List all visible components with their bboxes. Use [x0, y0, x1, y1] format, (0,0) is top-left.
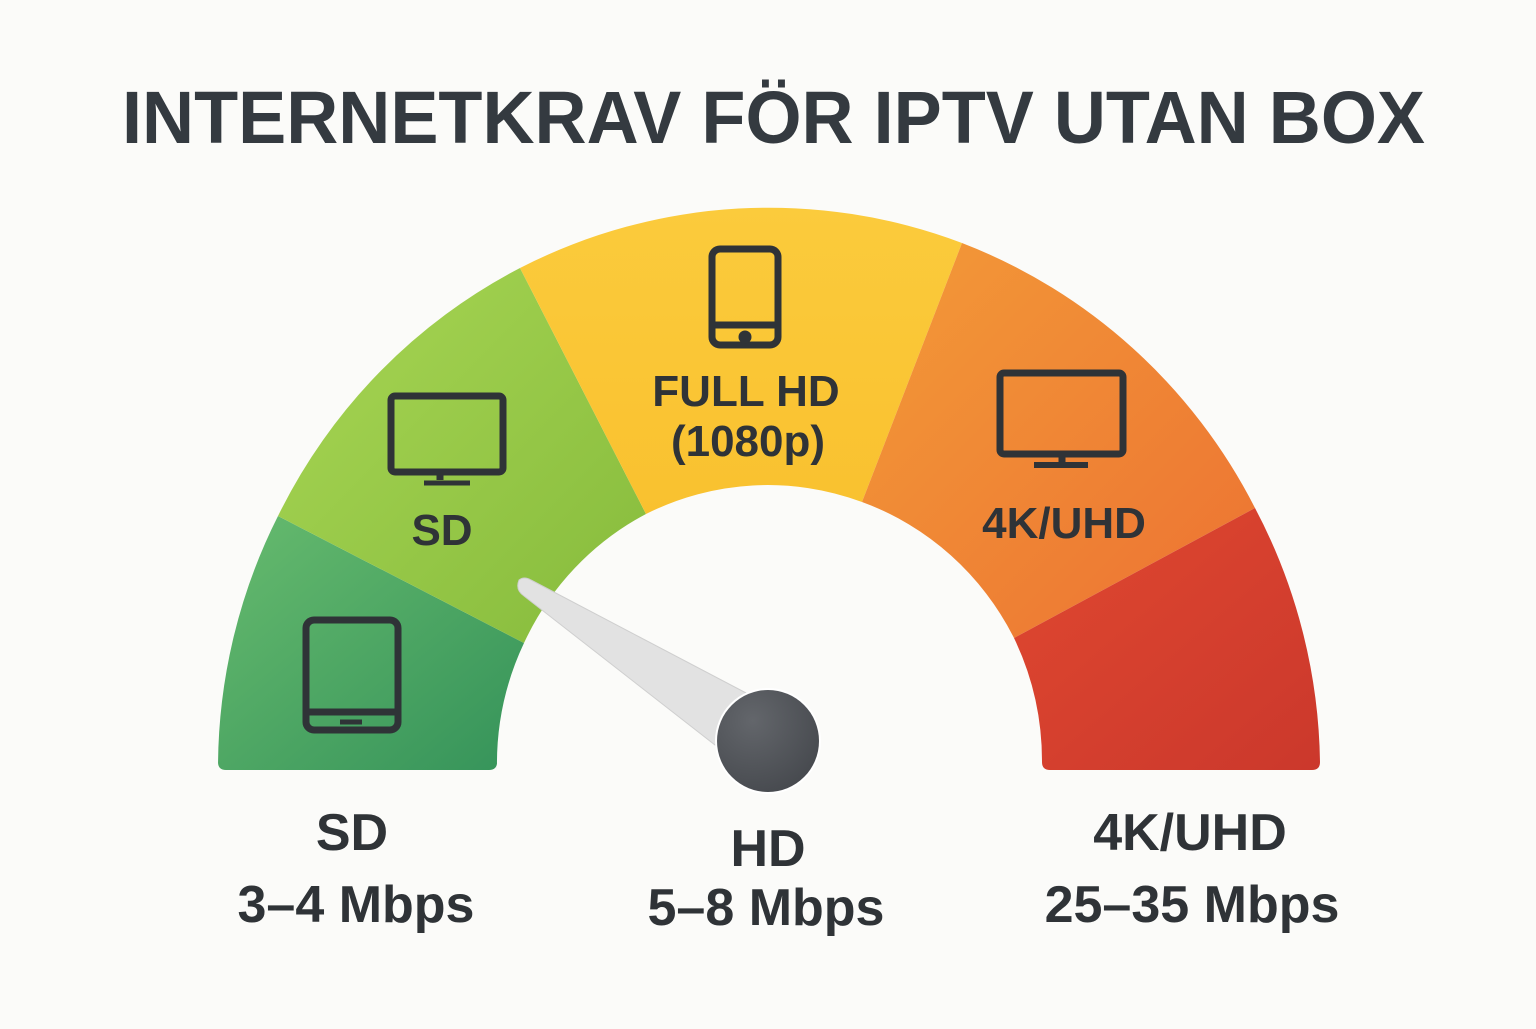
label: full hd: (1080p): [671, 417, 825, 466]
segment: orange: [862, 243, 1255, 638]
label: full hd: [652, 367, 840, 466]
caption: 4K: [1045, 804, 1339, 934]
caption: SD: [238, 804, 474, 934]
label: full hd: FULL HD: [652, 367, 840, 416]
needle: [518, 578, 821, 794]
caption: SD: SD: [316, 804, 388, 862]
segment: dark green: [218, 516, 524, 770]
caption: SD: 3–4 Mbps: [238, 876, 474, 934]
icon: tv SD: [391, 396, 503, 483]
segment: yellow: [520, 208, 962, 514]
caption: HD: HD: [730, 820, 806, 878]
caption: 4K: 4K/UHD: [1093, 804, 1287, 862]
segment: light green: [278, 268, 646, 643]
segment: red: [1014, 508, 1320, 770]
gauge: [218, 208, 1320, 794]
label: 4K/UHD: 4K/UHD: [982, 499, 1146, 548]
caption: HD: [648, 820, 884, 937]
icon: tv 4K: [1000, 373, 1123, 465]
icon: phone: [712, 249, 778, 345]
icon: tablet: [306, 620, 398, 730]
caption: HD: 5–8 Mbps: [648, 879, 884, 937]
title: INTERNETKRAV FÖR IPTV UTAN BOX: [122, 76, 1425, 159]
label: SD: SD: [411, 506, 473, 555]
caption: 4K: 25–35 Mbps: [1045, 876, 1339, 934]
